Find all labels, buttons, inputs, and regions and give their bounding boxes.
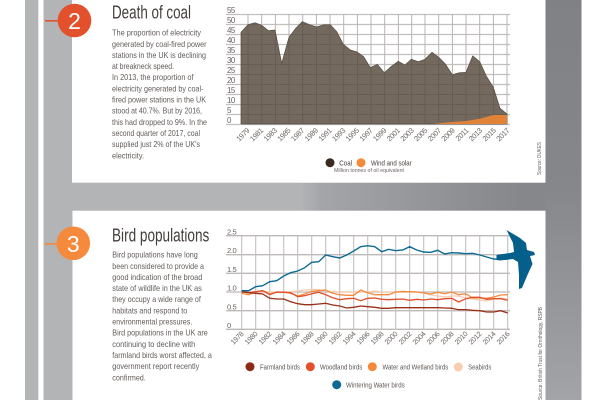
line: water and wetland birds xyxy=(242,290,508,298)
x axis labels: coal chart: 2001 xyxy=(385,126,402,143)
y axis labels: coal chart: 45 xyxy=(227,26,236,35)
text block: coal description: stations in the UK is declining xyxy=(112,51,206,60)
x axis labels: coal chart: 1993 xyxy=(330,126,347,143)
x axis labels: bird chart: 2008 xyxy=(439,329,456,346)
y axis labels: coal chart: 35 xyxy=(227,46,236,55)
x axis labels: coal chart: 2003 xyxy=(398,126,416,143)
x axis labels: bird chart: 2002 xyxy=(397,329,414,346)
y axis labels: bird chart xyxy=(227,227,237,330)
text block: bird description: continuing to decline with xyxy=(112,340,196,349)
text block: bird description: Bird populations in the UK are xyxy=(112,329,208,338)
y axis labels: coal chart: 15 xyxy=(227,86,236,95)
source: British Trust for Ornithology: Source: British Trust for Ornithology, RSPB xyxy=(538,307,544,400)
legend: coal chart: Wind and solar xyxy=(371,158,412,167)
legend: bird chart: Wintering Water birds xyxy=(346,380,405,389)
line: woodland birds xyxy=(242,291,508,302)
text block: coal description: fired power stations in the UK xyxy=(112,96,206,104)
text block: bird description: government report recently xyxy=(112,362,200,371)
text block: coal description: In 2013, the proportion of xyxy=(112,73,194,82)
y axis labels: coal chart: 10 xyxy=(227,96,236,105)
x axis labels: coal chart: 2011 xyxy=(454,126,470,143)
legend: bird chart: Woodland birds xyxy=(320,362,362,371)
number badge 2 xyxy=(45,4,91,37)
x axis labels: coal chart xyxy=(234,126,512,143)
background: left grey band xyxy=(25,0,38,400)
text block: bird description: farmland birds worst affected, a xyxy=(112,351,212,360)
y axis labels: coal chart: 55 xyxy=(227,6,236,15)
y axis labels: bird chart: 1.5 xyxy=(227,265,237,274)
number badge 3 xyxy=(45,226,90,260)
text block: coal description: stood at 40.7%. But by 2016, xyxy=(112,107,202,116)
x axis labels: bird chart: 1986 xyxy=(285,329,302,346)
x axis labels: bird chart: 2004 xyxy=(411,329,428,346)
x axis labels: bird chart: 2006 xyxy=(425,329,442,346)
background: right grey column xyxy=(545,0,582,400)
x axis labels: bird chart: 1996 xyxy=(355,329,372,346)
x axis labels: coal chart: 1999 xyxy=(371,126,388,143)
x axis labels: bird chart: 1992 xyxy=(327,329,344,346)
x axis labels: bird chart: 2012 xyxy=(467,329,484,346)
text block: coal description: electricity generated by coal- xyxy=(112,84,204,93)
text block: bird description: been considered to provide a xyxy=(112,262,204,271)
text block: coal description: at breakneck speed. xyxy=(112,62,174,71)
y axis labels: coal chart xyxy=(227,6,236,125)
y axis labels: bird chart: 2.0 xyxy=(227,246,237,255)
y axis labels: coal chart: 5 xyxy=(227,106,232,115)
x axis labels: coal chart: 2007 xyxy=(426,126,443,143)
x axis labels: coal chart: 1979 xyxy=(234,126,252,143)
y axis labels: coal chart: 20 xyxy=(227,76,236,85)
x axis labels: coal chart: 2009 xyxy=(439,126,457,143)
x axis labels: bird chart: 1982 xyxy=(257,329,274,346)
text block: coal description: this had dropped to 9%. In the xyxy=(112,118,207,127)
x axis labels: coal chart: 1981 xyxy=(248,126,265,143)
x axis labels: bird chart: 2016 xyxy=(495,329,512,346)
x axis labels: coal chart: 2013 xyxy=(467,126,484,143)
x axis labels: coal chart: 2015 xyxy=(481,126,498,143)
x axis labels: coal chart: 1983 xyxy=(262,126,279,143)
heading: bird populations: Bird populations xyxy=(112,226,209,246)
x axis labels: bird chart: 2010 xyxy=(453,329,470,346)
text block: bird description: they occupy a wide range of xyxy=(112,295,201,304)
panel: bird populations xyxy=(45,211,546,400)
x axis labels: bird chart: 2014 xyxy=(481,329,498,346)
text block: coal description: supplied just 2% of the UK's xyxy=(112,140,200,149)
number badge 3: 3 xyxy=(67,231,80,257)
source: DUKES: Source: DUKES xyxy=(537,142,543,175)
background: grey page area xyxy=(44,0,304,400)
y axis labels: coal chart: 30 xyxy=(227,56,236,65)
legend: coal chart: Coal xyxy=(339,158,352,167)
x axis labels: bird chart: 1980 xyxy=(243,329,260,346)
background: grey gradient area xyxy=(300,0,550,400)
y axis labels: bird chart: 2.5 xyxy=(227,227,237,236)
line: farmland birds xyxy=(242,292,508,313)
line chart: bird populations xyxy=(226,236,510,329)
x axis labels: bird chart: 1978 xyxy=(229,329,246,346)
text block: bird description xyxy=(112,251,212,382)
y axis labels: coal chart: 0 xyxy=(227,116,232,125)
y axis labels: coal chart: 40 xyxy=(227,36,236,45)
y axis labels: bird chart: 0.5 xyxy=(227,302,237,311)
legend: coal chart xyxy=(326,158,412,174)
y axis labels: coal chart: 50 xyxy=(227,16,236,25)
panel: death of coal xyxy=(45,0,546,183)
x axis labels: bird chart: 1998 xyxy=(369,329,386,346)
x axis labels: coal chart: 1991 xyxy=(316,126,334,143)
area chart: coal and wind and solar xyxy=(226,14,510,124)
text block: coal description: The proportion of electricity xyxy=(112,29,202,38)
text block: coal description: electricity. xyxy=(112,151,144,160)
x axis labels: bird chart: 1988 xyxy=(299,329,316,346)
x axis labels: coal chart: 1985 xyxy=(275,126,293,143)
x axis labels: coal chart: 2005 xyxy=(412,126,429,143)
text block: bird description: Bird populations have long xyxy=(112,251,198,260)
heading: death of coal: Death of coal xyxy=(112,2,191,22)
x axis labels: bird chart xyxy=(229,329,512,346)
y axis labels: bird chart: 1.0 xyxy=(227,284,237,293)
x axis labels: bird chart: 1990 xyxy=(313,329,330,346)
text block: bird description: environmental pressures. xyxy=(112,318,192,326)
line: wintering water birds xyxy=(242,246,508,291)
text block: coal description: generated by coal-fired power xyxy=(112,40,207,49)
text block: bird description: confirmed. xyxy=(112,373,146,382)
x axis labels: bird chart: 1984 xyxy=(271,329,288,346)
icon: bird silhouette xyxy=(496,230,535,289)
legend: bird chart: Farmland birds xyxy=(260,362,300,371)
x axis labels: coal chart: 1987 xyxy=(289,126,306,143)
x axis labels: coal chart: 1989 xyxy=(303,126,320,143)
x axis labels: bird chart: 2000 xyxy=(383,329,400,346)
legend: coal chart: Million tonnes of oil equivalent xyxy=(334,168,404,174)
y axis labels: coal chart: 25 xyxy=(227,66,236,75)
x axis labels: coal chart: 1997 xyxy=(357,126,375,143)
text block: bird description: state of wildlife in the UK as xyxy=(112,284,202,293)
number badge 2: 2 xyxy=(68,8,81,34)
legend: bird chart: Seabirds xyxy=(468,362,491,371)
line: seabirds xyxy=(242,290,508,301)
legend: bird chart: Water and Wetland birds xyxy=(382,362,448,371)
text block: bird description: habitats and respond to xyxy=(112,306,188,315)
legend: bird chart xyxy=(246,362,491,389)
x axis labels: bird chart: 1994 xyxy=(341,329,358,346)
text block: bird description: good indication of the broad xyxy=(112,273,203,282)
x axis labels: coal chart: 2017 xyxy=(494,126,512,143)
text block: coal description xyxy=(112,29,207,160)
x axis labels: coal chart: 1995 xyxy=(344,126,361,143)
text block: coal description: second quarter of 2017, coal xyxy=(112,129,200,138)
y axis labels: bird chart: 0 xyxy=(227,321,231,330)
